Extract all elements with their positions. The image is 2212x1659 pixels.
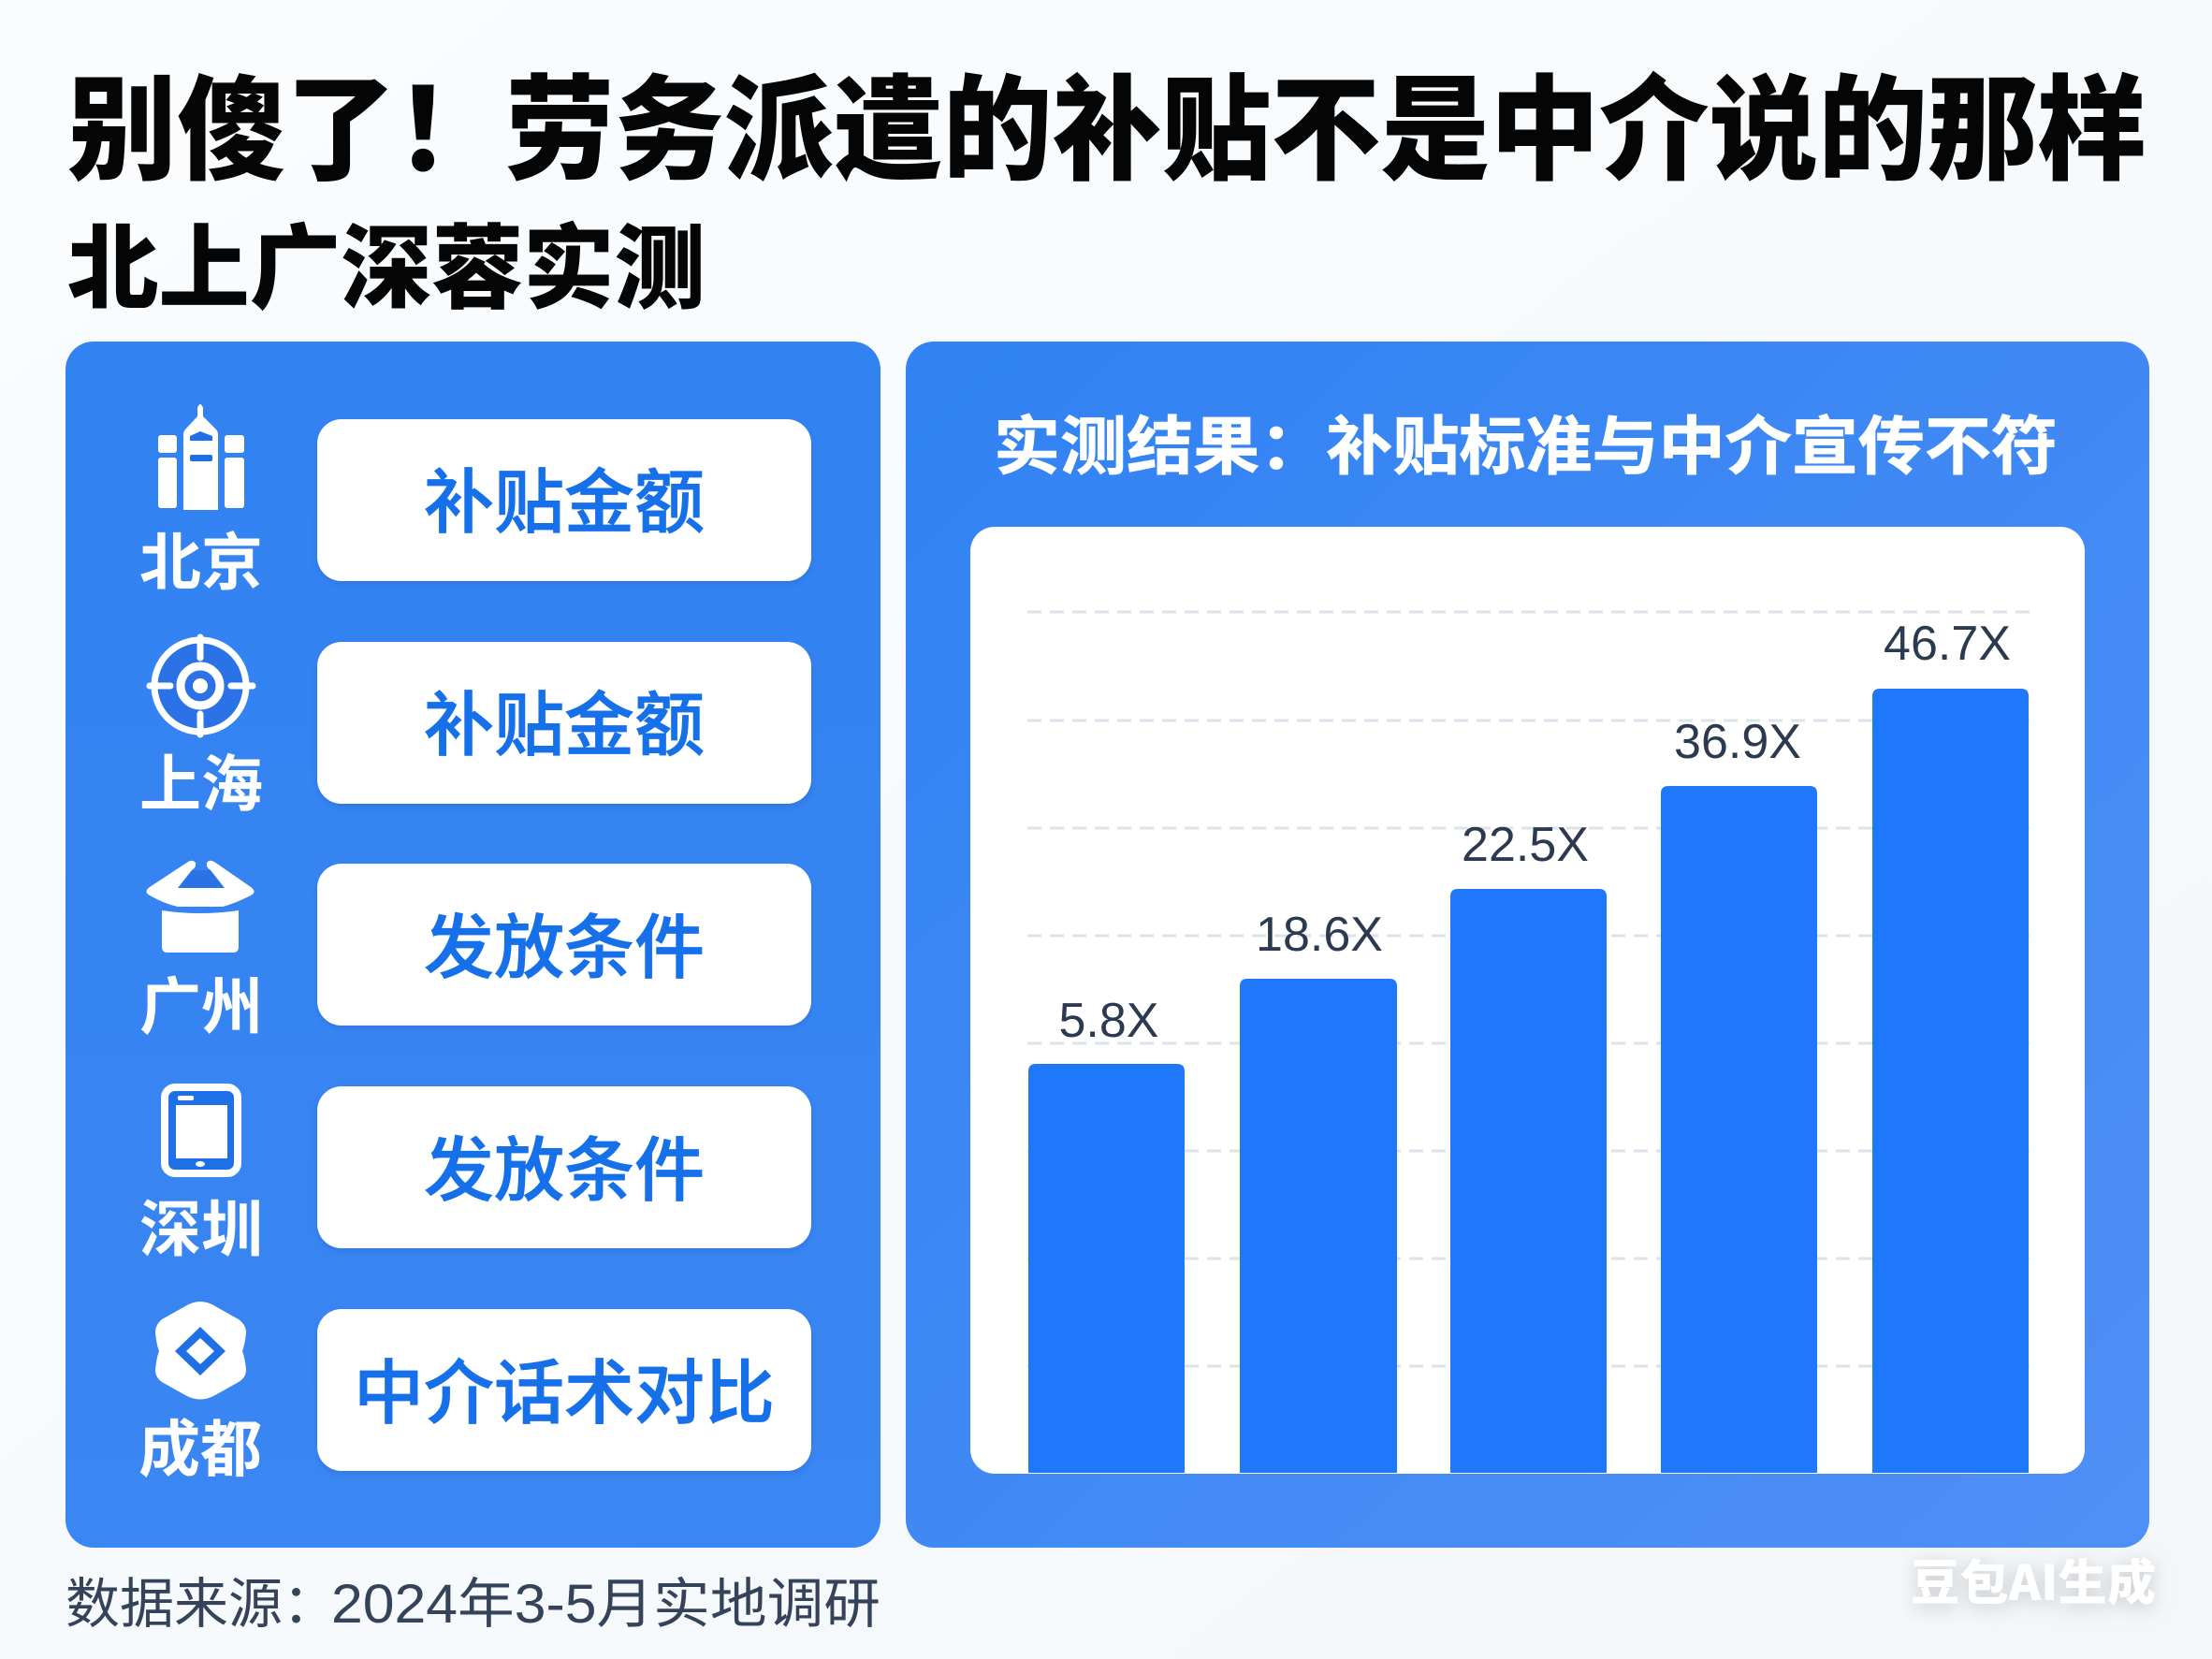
bar: 5.8X — [1028, 994, 1185, 1473]
label: Shanghai: 上海 — [139, 735, 263, 824]
row pill: Chengdu: 中介话术对比 — [354, 1336, 775, 1438]
bar chart — [970, 527, 2085, 1474]
bar: 36.9X: 36.9X — [1674, 715, 1801, 769]
panel: test results — [906, 342, 2149, 1548]
panel: cities and test items — [65, 342, 880, 1548]
title: 别傻了！劳务派遣的补贴不是中介说的那样 — [67, 38, 2147, 204]
row pill: Shanghai — [317, 642, 811, 804]
bar: 36.9X — [1661, 715, 1817, 1473]
icon: Guangzhou hat box — [146, 861, 255, 953]
bar: 5.8X: 5.8X — [1059, 994, 1158, 1048]
panel heading: 实测结果：补贴标准与中介宣传不符 — [994, 395, 2058, 488]
row pill: Beijing — [317, 419, 811, 581]
label: Beijing: 北京 — [139, 513, 263, 603]
icon: Shanghai target — [150, 637, 253, 735]
bar: 22.5X — [1450, 818, 1607, 1473]
row pill: Shenzhen: 发放条件 — [424, 1113, 705, 1215]
row pill: Guangzhou — [317, 864, 811, 1026]
row pill: Shanghai: 补贴金额 — [424, 668, 705, 770]
data source note: 2024年3-5月实地调研 — [331, 1574, 880, 1635]
bar: 46.7X: 46.7X — [1884, 617, 2011, 671]
subtitle: 北上广深蓉实测 — [67, 195, 706, 327]
bar: 18.6X: 18.6X — [1256, 908, 1383, 962]
watermark: 豆包AI生成 — [1911, 1544, 2156, 1614]
icon: Shenzhen tablet — [165, 1087, 238, 1173]
row pill: Chengdu — [317, 1309, 811, 1471]
row pill: Guangzhou: 发放条件 — [424, 891, 705, 993]
label: Guangzhou: 广州 — [139, 957, 263, 1047]
data source note: 数据来源： — [65, 1560, 337, 1638]
label: Shenzhen: 深圳 — [139, 1180, 263, 1270]
bar: 22.5X: 22.5X — [1462, 818, 1589, 872]
icon: Beijing tower — [158, 404, 244, 510]
icon: Chengdu diamond — [155, 1302, 246, 1400]
row pill: Beijing: 补贴金额 — [424, 445, 705, 547]
bar: 46.7X — [1872, 617, 2029, 1473]
label: Chengdu: 成都 — [138, 1400, 262, 1490]
row pill: Shenzhen — [317, 1086, 811, 1248]
bar: 18.6X — [1240, 908, 1397, 1473]
data source note — [65, 1560, 880, 1638]
